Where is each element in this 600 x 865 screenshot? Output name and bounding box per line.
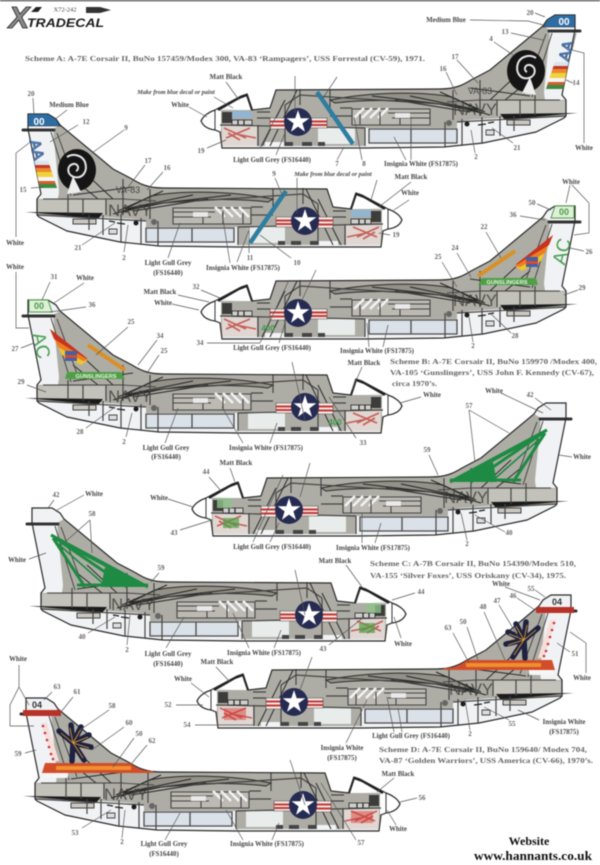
aircraft: scheme B left profile: GUNSLINGERS — [75, 374, 117, 380]
callouts: scheme D right profile: Matt Black — [201, 659, 234, 666]
callouts: scheme A left profile: Matt Black — [395, 174, 428, 181]
callouts: scheme D right profile: White — [492, 581, 510, 588]
callouts: scheme A right profile: Insignia White (FS17875) — [384, 161, 458, 168]
callouts: scheme A left profile: 9 — [124, 124, 128, 132]
callouts: scheme A left profile: 9 — [272, 170, 276, 178]
callouts: scheme B right profile: 24 — [452, 244, 459, 252]
callouts: scheme D right profile: 48 — [480, 603, 487, 611]
callouts: scheme B right profile: Light Gull Grey (FS16440) — [233, 345, 311, 352]
callouts: scheme A left profile: 10 — [294, 259, 301, 267]
logo: Xtradecal: X — [7, 0, 32, 35]
callouts: scheme B left profile: White — [423, 392, 441, 399]
callouts: scheme A right profile: Medium Blue — [426, 17, 466, 24]
callouts: scheme C right profile: White — [573, 454, 591, 461]
callouts: scheme B left profile: (FS16440) — [151, 454, 181, 461]
callouts: scheme A right profile: 16 — [440, 65, 447, 73]
aircraft: scheme B right profile: 00 — [559, 207, 569, 217]
callouts: scheme A left profile: 11 — [247, 254, 254, 262]
callouts: scheme B right profile: 29 — [578, 284, 586, 292]
callouts: scheme D left profile: 60 — [126, 719, 133, 727]
callouts: scheme A right profile: 21 — [514, 144, 521, 152]
caption: scheme C — [370, 559, 576, 580]
callouts: scheme A left profile: White — [6, 240, 24, 247]
callouts: scheme A left profile: 12 — [82, 118, 90, 126]
callouts: scheme A right profile: White — [575, 145, 593, 152]
callouts: scheme C left profile: 42 — [52, 491, 60, 499]
callouts: scheme C left profile: 58 — [88, 510, 96, 518]
callouts: scheme A left profile: 21 — [74, 244, 82, 252]
aircraft: scheme B left profile: 400 — [328, 418, 342, 427]
aircraft: scheme A right profile: AA — [556, 39, 577, 63]
callouts: scheme A right profile: 2 — [474, 153, 478, 161]
aircraft: scheme B right profile: 400 — [261, 324, 275, 333]
callouts: scheme C right profile: Light Gull Grey (FS16440) — [233, 544, 311, 551]
callouts: scheme D right profile: 54 — [184, 721, 191, 729]
callouts: scheme B left profile: White — [6, 264, 24, 271]
callouts: scheme C right profile: 44 — [202, 468, 210, 476]
callouts: scheme B left profile: Light Gull Grey — [143, 445, 190, 452]
website block: Website — [509, 834, 550, 848]
callouts: scheme B right profile: Insignia White (FS17875) — [340, 348, 414, 355]
callouts: scheme A left profile: Make from blue decal or paint — [293, 171, 372, 178]
callouts: scheme D left profile: Light Gull Grey — [141, 841, 188, 848]
callouts: scheme D right profile: 46 — [510, 592, 517, 600]
callouts: scheme A right profile: 17 — [452, 53, 459, 61]
callouts: scheme D right profile: 55 — [528, 585, 535, 593]
callouts: scheme C left profile: White — [394, 641, 412, 648]
callouts: scheme C left profile: 44 — [418, 588, 425, 596]
callouts: scheme A right profile: 8 — [362, 160, 366, 168]
caption: scheme B: Scheme B: A-7E Corsair II, BuNo 159970 /Modex 400, — [390, 357, 597, 366]
callouts: scheme D left profile: White — [9, 656, 27, 663]
callouts: scheme A left profile: 17 — [144, 157, 152, 165]
aircraft: scheme B right profile: AC — [549, 236, 576, 267]
callouts: scheme B left profile: 36 — [88, 301, 96, 309]
callouts: scheme B right profile: 34 — [196, 339, 204, 347]
callouts: scheme C right profile — [150, 388, 591, 552]
caption: scheme C: Scheme C: A-7B Corsair II, BuNo 154390/Modex 510, — [370, 559, 576, 568]
aircraft: scheme A right profile: VA-83 — [468, 86, 492, 96]
callouts: scheme D left profile: Matt Black — [382, 771, 415, 778]
callouts: scheme B right profile: 32 — [192, 283, 200, 291]
callouts: scheme C right profile: White — [485, 388, 503, 395]
aircraft: scheme B left profile: AC — [27, 330, 54, 361]
top edge — [0, 0, 600, 1]
callouts: scheme D right profile: 47 — [494, 597, 501, 605]
aircraft: scheme A left profile: NAVY — [108, 202, 152, 220]
callouts: scheme A left profile: Insignia White (FS17875) — [206, 265, 280, 272]
callouts: scheme D left profile: 50 — [136, 730, 143, 738]
callouts: scheme C right profile: White — [150, 495, 168, 502]
callouts: scheme B left profile — [6, 264, 441, 461]
callouts: scheme B right profile: White — [562, 179, 580, 186]
callouts: scheme B right profile: 25 — [434, 253, 442, 261]
callouts: scheme D right profile: 2 — [468, 730, 472, 738]
aircraft: scheme D left profile: NAVY — [104, 786, 148, 804]
callouts: scheme D left profile: White — [389, 826, 407, 833]
callouts: scheme C left profile: Light Gull Grey — [145, 651, 192, 658]
callouts: scheme B right profile: 50 — [528, 199, 536, 207]
caption: scheme D — [379, 745, 593, 765]
callouts: scheme B left profile: 28 — [76, 428, 84, 436]
callouts: scheme C left profile — [8, 491, 425, 668]
aircraft: scheme C left profile — [27, 508, 406, 641]
callouts: scheme B right profile: 22 — [480, 223, 488, 231]
aircraft: scheme D right profile: 04 — [552, 597, 562, 607]
callouts: scheme A right profile: Light Gull Grey (FS16440) — [233, 157, 311, 164]
callouts: scheme D left profile: (FS16440) — [149, 851, 179, 858]
website block: www.hannants.co.uk — [474, 849, 592, 863]
caption: scheme A: Scheme A: A-7E Corsair II, BuNo 157459/Modex 300, VA-83 ‘Rampagers’, USS Forrestal (CV-59), 1971. — [25, 54, 425, 63]
callouts: scheme B left profile: 34 — [156, 332, 164, 340]
callouts: scheme A right profile: Matt Black — [210, 74, 243, 81]
callouts: scheme D right profile: 55 — [508, 720, 516, 728]
aircraft: scheme B right profile: GUNSLINGERS — [486, 280, 528, 286]
callouts: scheme C right profile: 42 — [526, 391, 534, 399]
callouts: scheme C right profile: 40 — [506, 529, 513, 537]
aircraft: scheme A left profile: VA-83 — [116, 185, 140, 195]
callouts: scheme D right profile: 63 — [444, 624, 452, 632]
aircraft: scheme B left profile: NAVY — [108, 388, 152, 406]
callouts: scheme C left profile: 40 — [78, 633, 86, 641]
logo: Xtradecal: TRADECAL — [27, 16, 104, 30]
callouts: scheme C right profile: 57 — [466, 402, 473, 410]
callouts: scheme A left profile: White — [401, 190, 419, 197]
callouts: scheme D right profile: (FS17875) — [549, 729, 579, 736]
callouts: scheme C right profile: Matt Black — [220, 460, 253, 467]
callouts: scheme A right profile: 4 — [489, 35, 493, 43]
callouts: scheme B left profile: 2 — [122, 438, 126, 446]
callouts: scheme D left profile — [9, 656, 426, 858]
callouts: scheme C left profile: 43 — [320, 645, 327, 653]
callouts: scheme D left profile: 57 — [358, 839, 365, 847]
callouts: scheme D left profile: 53 — [72, 829, 79, 837]
callouts: scheme A right profile: 7 — [335, 160, 339, 168]
callouts: scheme B left profile: 25 — [160, 347, 168, 355]
callouts: scheme D left profile: Insignia White (FS17875) — [230, 841, 304, 848]
aircraft: scheme A right profile: NAVY — [453, 101, 497, 119]
callouts: scheme B left profile: Matt Black — [348, 360, 381, 367]
aircraft: scheme A right profile — [201, 15, 580, 148]
callouts: scheme A right profile — [136, 9, 593, 168]
aircraft: scheme A right profile: 00 — [558, 17, 570, 28]
aircraft: scheme C right profile: NAVY — [444, 489, 488, 507]
callouts: scheme C right profile: 59 — [424, 446, 431, 454]
logo: Xtradecal — [7, 0, 111, 35]
callouts: scheme A left profile — [6, 90, 428, 277]
aircraft: scheme D left profile — [21, 698, 400, 831]
callouts: scheme A left profile: 16 — [164, 164, 171, 172]
callouts: scheme C right profile: 2 — [465, 540, 469, 548]
callouts: scheme B left profile: 31 — [50, 273, 58, 281]
aircraft: scheme D right profile: NAVY — [449, 681, 493, 699]
callouts: scheme B left profile: 33 — [360, 439, 367, 447]
callouts: scheme C left profile: White — [8, 557, 26, 564]
callouts: scheme D right profile: 51 — [572, 650, 579, 658]
callouts: scheme D left profile: 59 — [14, 750, 22, 758]
callouts: scheme B right profile: 28 — [512, 332, 519, 340]
callouts: scheme A left profile: Medium Blue — [49, 102, 89, 109]
aircraft: scheme B right profile: NAVY — [453, 292, 497, 310]
callouts: scheme B right profile: 2 — [471, 342, 475, 350]
callouts: scheme B right profile: Matt Black — [144, 289, 177, 296]
logo: Xtradecal: X72-242 — [53, 6, 77, 14]
callouts: scheme B left profile: 25 — [128, 318, 135, 326]
callouts: scheme D left profile: 2 — [120, 838, 124, 846]
callouts: scheme A left profile: (FS16440) — [153, 270, 183, 277]
aircraft: scheme D left profile: 04 — [32, 700, 42, 710]
callouts: scheme A left profile: 2 — [122, 254, 126, 262]
callouts: scheme C left profile: 59 — [158, 564, 165, 572]
callouts: scheme B left profile: 27 — [12, 345, 19, 353]
callouts: scheme A left profile: 19 — [392, 231, 400, 239]
caption: scheme C: VA-155 ‘Silver Foxes’, USS Oriskany (CV-34), 1975. — [370, 571, 566, 580]
callouts: scheme C left profile: (FS16440) — [153, 661, 183, 668]
callouts: scheme D left profile: 63 — [54, 683, 61, 691]
callouts: scheme C left profile: Matt Black — [319, 558, 352, 565]
aircraft: scheme B right profile — [201, 206, 580, 339]
callouts: scheme D right profile: Insignia White — [321, 745, 363, 752]
callouts: scheme D left profile: 56 — [418, 794, 426, 802]
callouts: scheme A right profile: 19 — [198, 147, 205, 155]
callouts: scheme D right profile: 52 — [164, 701, 172, 709]
callouts: scheme A right profile: Make from blue decal or paint — [136, 89, 215, 96]
callouts: scheme B right profile: 26 — [586, 248, 593, 256]
callouts: scheme C left profile: Insignia White (FS17875) — [227, 650, 301, 657]
callouts: scheme D right profile: 50 — [460, 618, 467, 626]
callouts: scheme A right profile: 14 — [572, 79, 580, 87]
callouts: scheme B right profile — [144, 179, 593, 355]
callouts: scheme D right profile: White — [573, 675, 591, 682]
aircraft: scheme C right profile — [192, 403, 571, 536]
callouts: scheme D right profile: Insignia White — [543, 719, 585, 726]
callouts: scheme D right profile: (FS17875) — [327, 755, 357, 762]
callouts: scheme A left profile: 20 — [28, 90, 35, 98]
callouts: scheme D left profile: 58 — [108, 702, 116, 710]
callouts: scheme B right profile: White — [154, 300, 172, 307]
aircraft: scheme A left profile: AA — [26, 138, 47, 162]
callouts: scheme A right profile: White — [171, 102, 189, 109]
callouts: scheme D right profile: Light Gull Grey (FS16440) — [372, 733, 450, 740]
callouts: scheme A left profile: 15 — [20, 186, 27, 194]
callouts: scheme C left profile: 2 — [125, 646, 129, 654]
caption: scheme D: Scheme D: A-7E Corsair II, BuNo 159640/ Modex 704, — [379, 745, 587, 754]
aircraft: scheme B left profile: 00 — [34, 301, 44, 311]
aircraft: scheme B left profile — [23, 300, 402, 433]
aircraft: scheme A left profile: 00 — [33, 117, 45, 128]
callouts: scheme B left profile: White — [76, 275, 94, 282]
caption: scheme D: VA-87 ‘Golden Warriors’, USS America (CV-66), 1970’s. — [379, 756, 593, 765]
callouts: scheme B right profile: 36 — [510, 211, 517, 219]
callouts: scheme B left profile: 29 — [18, 378, 25, 386]
callouts: scheme B left profile: Insignia White (FS17875) — [229, 445, 303, 452]
callouts: scheme D right profile: White — [174, 676, 192, 683]
callouts: scheme A right profile: 20 — [526, 9, 534, 17]
callouts: scheme C left profile: White — [85, 491, 103, 498]
callouts: scheme D left profile: 61 — [74, 688, 81, 696]
callouts: scheme A right profile: 13 — [502, 28, 509, 36]
callouts: scheme D left profile: 62 — [148, 737, 156, 745]
caption: scheme B: circa 1970’s. — [392, 379, 437, 388]
aircraft: scheme D right profile — [197, 595, 576, 728]
aircraft: scheme C left profile: NAVY — [111, 596, 155, 614]
aircraft: scheme A left profile — [23, 114, 402, 247]
callouts: scheme D right profile — [164, 581, 591, 762]
callouts: scheme C right profile: Insignia White (FS17875) — [336, 545, 410, 552]
caption: scheme B — [390, 357, 597, 388]
website block — [474, 834, 592, 863]
callouts: scheme C right profile: 43 — [170, 529, 178, 537]
caption: scheme B: VA-105 ‘Gunslingers’, USS John F. Kennedy (CV-67), — [390, 368, 594, 377]
callouts: scheme A left profile: Light Gull Grey — [145, 260, 192, 267]
